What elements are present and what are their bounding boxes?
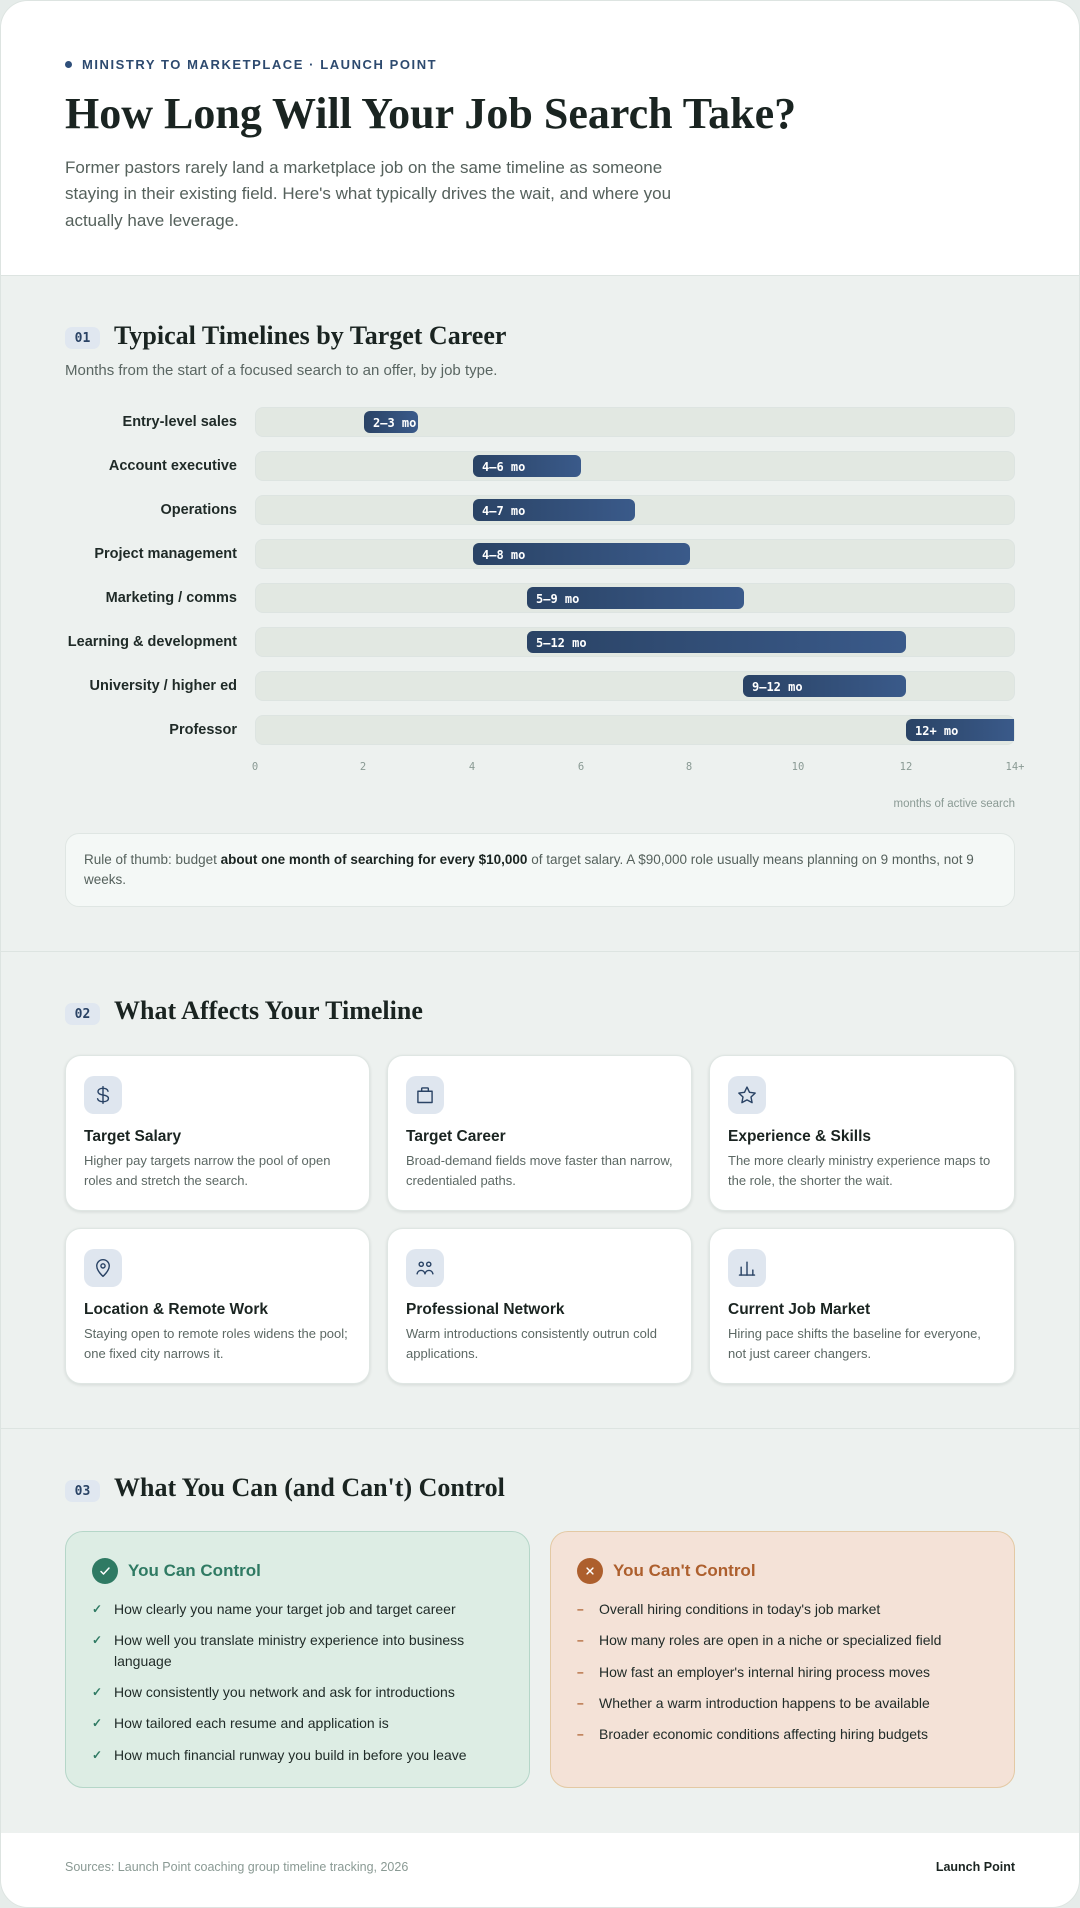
row: professor: 12+ mo	[915, 724, 958, 738]
control list: How well you translate ministry experience into business	[114, 1632, 464, 1648]
row: professor	[169, 715, 1015, 745]
callout: rule of thumb	[65, 833, 1015, 907]
subtitle: actually have leverage.	[65, 211, 239, 230]
card: professional network: Warm introductions consistently outrun cold	[406, 1326, 657, 1341]
row: account executive	[109, 451, 1015, 481]
section 2 badge: 02	[75, 1007, 90, 1022]
icon: bar chart	[728, 1249, 766, 1287]
card: current job market: Hiring pace shifts the baseline for everyone,	[728, 1326, 981, 1341]
card: target salary: Higher pay targets narrow the pool of open	[84, 1153, 330, 1168]
sources: Sources: Launch Point coaching group timeline tracking, 2026	[65, 1860, 408, 1874]
card: target salary: roles and stretch the search.	[84, 1173, 248, 1188]
card: experience & skills	[709, 1055, 1015, 1211]
card: target career: Target Career	[406, 1128, 506, 1145]
section 1 badge: 01	[75, 331, 90, 346]
no-control list: Whether a warm introduction happens to be available	[599, 1695, 930, 1711]
card: experience & skills: the role, the shorter the wait.	[728, 1173, 893, 1188]
section 3 badge: 03	[75, 1484, 90, 1499]
card: target career: Broad-demand fields move faster than narrow,	[406, 1153, 673, 1168]
icon: dollar	[84, 1076, 122, 1114]
icon: check circle	[92, 1558, 118, 1584]
section 1 badge	[65, 327, 100, 349]
control list: ✓	[92, 1602, 102, 1616]
row: learning & development	[68, 627, 1015, 657]
control list: ✓	[92, 1633, 102, 1647]
brand: Launch Point	[936, 1860, 1015, 1874]
range bar chart	[68, 407, 1015, 745]
row: project management: Project management	[94, 546, 237, 562]
axis ticks	[252, 761, 1024, 773]
axis ticks: 12	[900, 761, 912, 773]
axis ticks: 10	[792, 761, 804, 773]
panel: you can control	[65, 1531, 530, 1788]
control list	[92, 1601, 467, 1763]
row: project management: 4–8 mo	[482, 548, 525, 562]
card: experience & skills: Experience & Skills	[728, 1128, 871, 1145]
section 2: what affects your timeline	[0, 951, 1080, 1429]
icon: location pin	[84, 1249, 122, 1287]
section 3 divider	[0, 1428, 1080, 1429]
panel heading: You Can Control	[128, 1561, 261, 1580]
footer	[0, 1833, 1080, 1908]
no-control list: How many roles are open in a niche or specialized field	[599, 1632, 941, 1648]
control list: ✓	[92, 1685, 102, 1699]
control list: How consistently you network and ask for introductions	[114, 1684, 455, 1700]
control list: ✓	[92, 1748, 102, 1762]
section 1 heading: Typical Timelines by Target Career	[114, 321, 506, 350]
card: target career	[387, 1055, 692, 1211]
card: professional network	[387, 1228, 692, 1384]
panel heading: You Can't Control	[613, 1561, 756, 1580]
no-control list: How fast an employer's internal hiring process moves	[599, 1664, 930, 1680]
icon: briefcase	[406, 1076, 444, 1114]
callout: rule of thumb: Rule of thumb: budget about one month of searching for every $10,000 of target salary. A $90,000 role usually means planning on 9 months, not 9 weeks.	[84, 852, 974, 887]
card: target career: credentialed paths.	[406, 1173, 516, 1188]
row: marketing / comms: Marketing / comms	[106, 590, 237, 606]
title: How Long Will Your Job Search Take?	[65, 89, 796, 138]
no-control list	[577, 1601, 941, 1742]
card: professional network: Professional Network	[406, 1301, 564, 1318]
axis ticks: 14+	[1006, 761, 1024, 773]
row: professor: Professor	[169, 722, 237, 738]
row: university / higher ed: University / higher ed	[90, 678, 237, 694]
no-control list: –	[577, 1633, 584, 1647]
row: university / higher ed	[90, 671, 1015, 701]
section 3 badge	[65, 1480, 100, 1502]
icon: cross circle	[577, 1558, 603, 1584]
row: operations	[160, 495, 1015, 525]
card: current job market: not just career changers.	[728, 1346, 871, 1361]
subtitle	[65, 158, 671, 230]
card: current job market	[709, 1228, 1015, 1384]
section 1: typical timelines	[0, 275, 1080, 951]
card: professional network: applications.	[406, 1346, 478, 1361]
row: operations: Operations	[160, 502, 237, 518]
row: entry-level sales	[123, 407, 1015, 437]
control list: ✓	[92, 1716, 102, 1730]
row: marketing / comms	[106, 583, 1015, 613]
header panel	[0, 0, 1080, 275]
row: marketing / comms: 5–9 mo	[536, 592, 579, 606]
section 3 heading: What You Can (and Can't) Control	[114, 1473, 505, 1502]
no-control list: Broader economic conditions affecting hiring budgets	[599, 1726, 928, 1742]
card: experience & skills: The more clearly ministry experience maps to	[728, 1153, 990, 1168]
axis caption: months of active search	[894, 798, 1015, 810]
axis ticks: 8	[686, 761, 692, 773]
card: location & remote work	[65, 1228, 370, 1384]
row: operations: 4–7 mo	[482, 504, 525, 518]
control list: How clearly you name your target job and target career	[114, 1601, 456, 1617]
section 1 subheading: Months from the start of a focused search to an offer, by job type.	[65, 362, 497, 379]
row: learning & development: 5–12 mo	[536, 636, 587, 650]
row: learning & development: Learning & development	[68, 634, 237, 650]
axis ticks: 4	[469, 761, 475, 773]
card: location & remote work: one fixed city narrows it.	[84, 1346, 223, 1361]
eyebrow dot	[65, 61, 72, 68]
no-control list: Overall hiring conditions in today's job market	[599, 1601, 880, 1617]
no-control list: –	[577, 1696, 584, 1710]
row: account executive: 4–6 mo	[482, 460, 525, 474]
row: entry-level sales: 2–3 mo	[373, 416, 416, 430]
icon: people	[406, 1249, 444, 1287]
control list: language	[114, 1653, 172, 1669]
card: location & remote work: Staying open to remote roles widens the pool;	[84, 1326, 348, 1341]
subtitle: Former pastors rarely land a marketplace job on the same timeline as someone	[65, 158, 662, 177]
no-control list: –	[577, 1602, 584, 1616]
row: project management	[94, 539, 1015, 569]
eyebrow: MINISTRY TO MARKETPLACE · LAUNCH POINT	[82, 57, 437, 72]
no-control list: –	[577, 1665, 584, 1679]
control list: How much financial runway you build in before you leave	[114, 1747, 467, 1763]
card: location & remote work: Location & Remote Work	[84, 1301, 268, 1318]
icon: star	[728, 1076, 766, 1114]
section 2 heading: What Affects Your Timeline	[114, 996, 423, 1025]
axis ticks: 0	[252, 761, 258, 773]
card: target salary	[65, 1055, 370, 1211]
subtitle: staying in their existing field. Here's what typically drives the wait, and where you	[65, 184, 671, 203]
card: target salary: Target Salary	[84, 1128, 181, 1145]
panel: you can't control	[550, 1531, 1015, 1788]
axis ticks: 6	[578, 761, 584, 773]
control list: How tailored each resume and application is	[114, 1715, 389, 1731]
section 2 badge	[65, 1003, 100, 1025]
axis ticks: 2	[360, 761, 366, 773]
row: university / higher ed: 9–12 mo	[752, 680, 803, 694]
card: current job market: Current Job Market	[728, 1301, 870, 1318]
no-control list: –	[577, 1727, 584, 1741]
row: entry-level sales: Entry-level sales	[123, 414, 237, 430]
row: account executive: Account executive	[109, 458, 237, 474]
